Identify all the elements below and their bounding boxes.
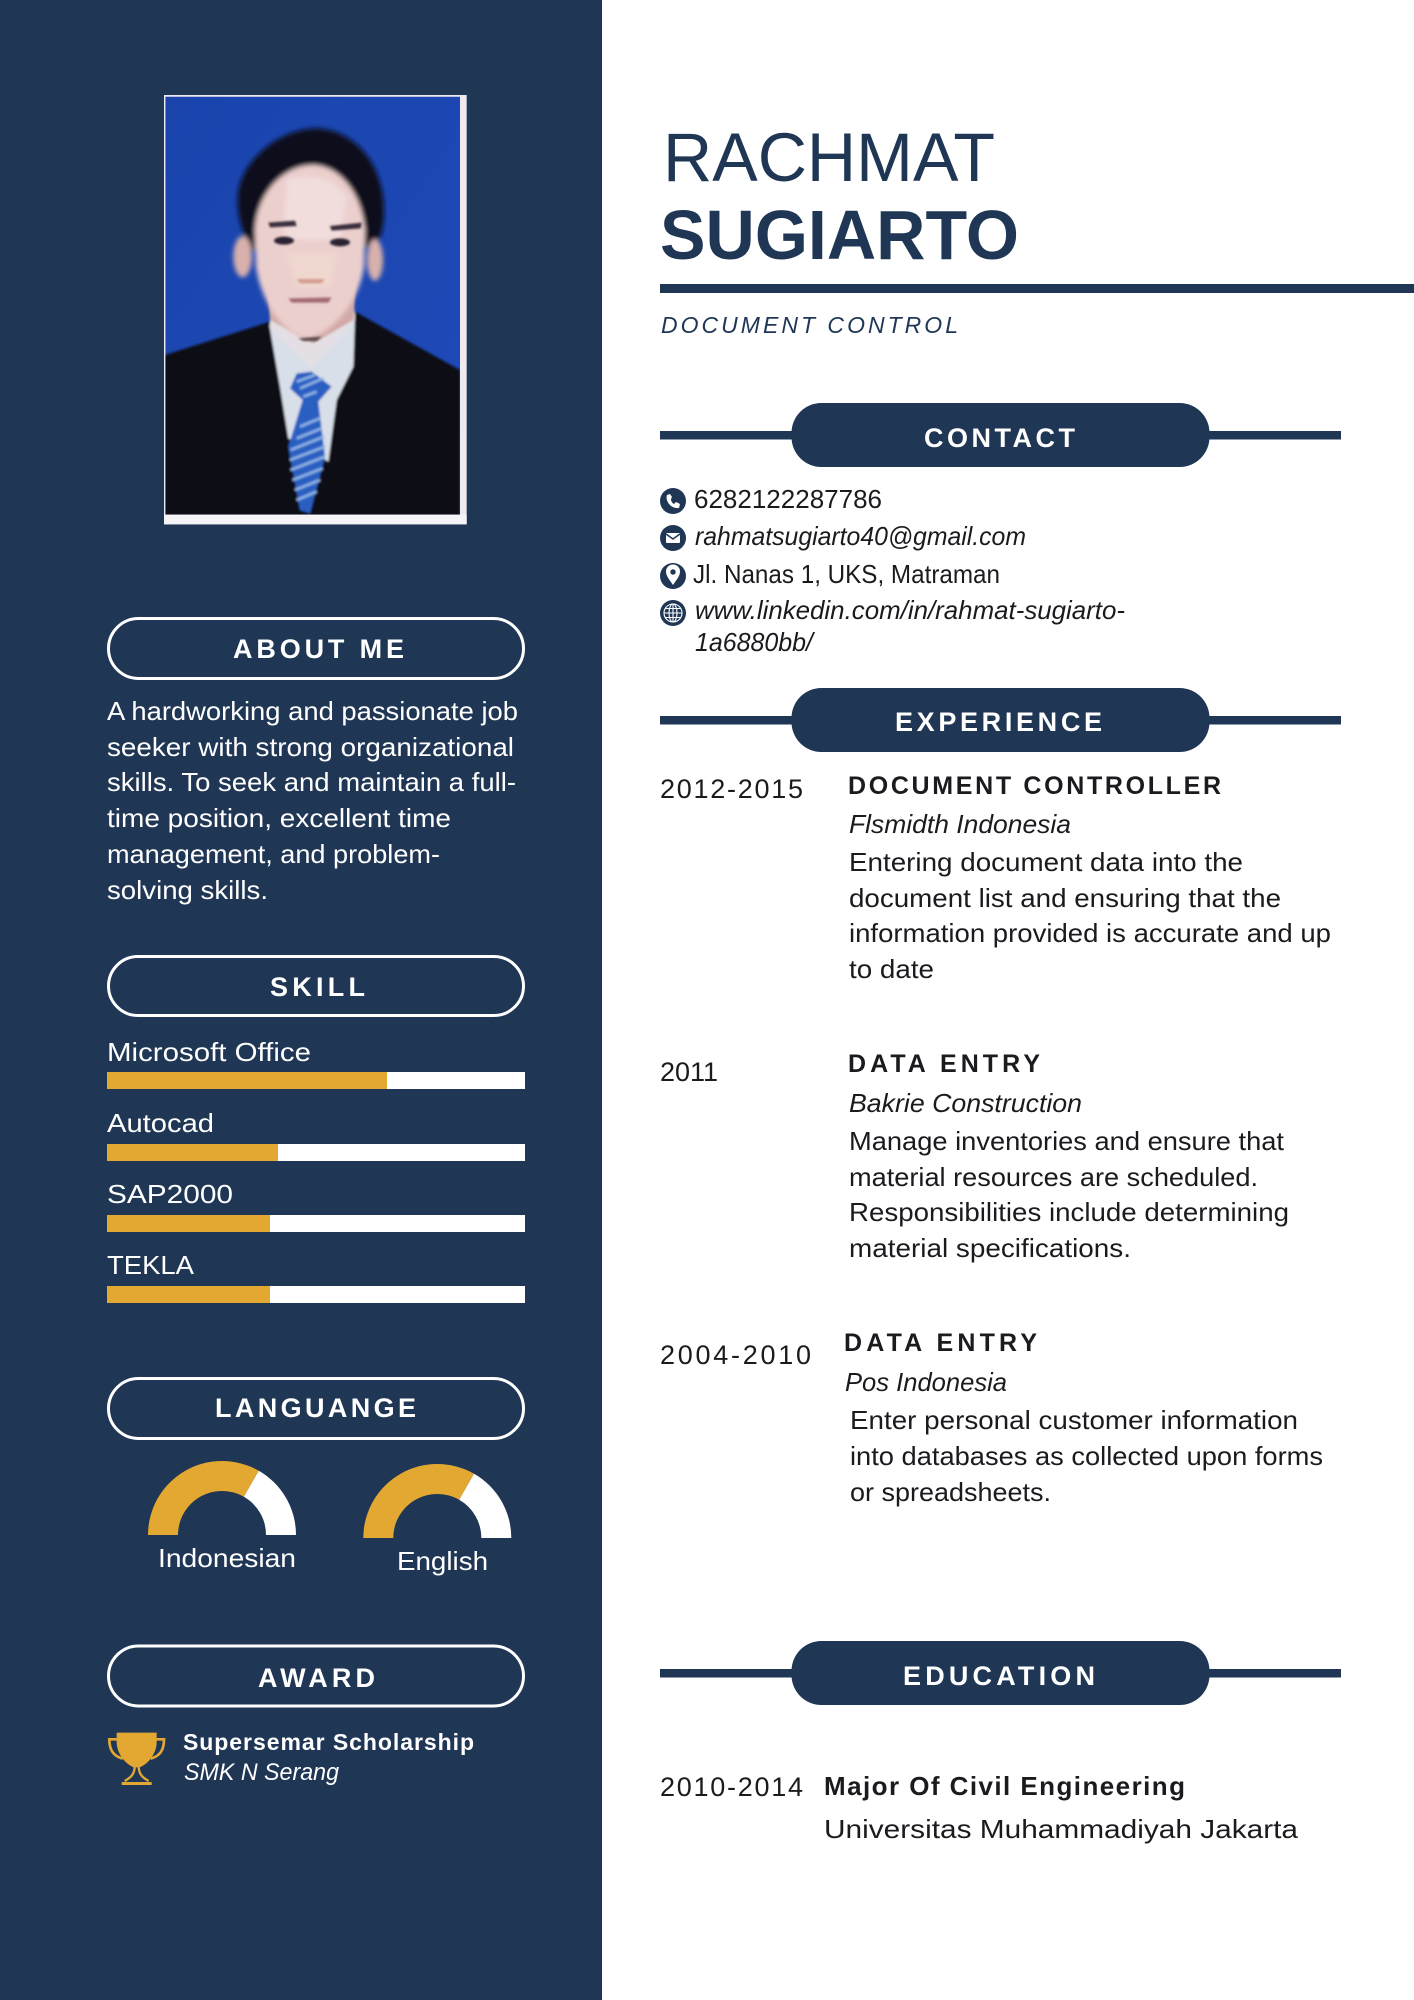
gauge: English: English xyxy=(397,1546,488,1576)
name: SUGIARTO xyxy=(660,196,1019,274)
experience entry 2011: Responsibilities include determining xyxy=(849,1197,1289,1227)
about me text: A hardworking and passionate job xyxy=(107,696,518,726)
award heading xyxy=(108,1646,524,1706)
contact: email: rahmatsugiarto40@gmail.com xyxy=(695,521,1026,551)
experience entry 2004-2010: Pos Indonesia xyxy=(845,1367,1007,1397)
experience heading xyxy=(660,688,1341,752)
education entry: Universitas Muhammadiyah Jakarta xyxy=(824,1814,1299,1844)
gauge: Indonesian xyxy=(148,1461,296,1573)
experience entry 2004-2010: Enter personal customer information xyxy=(850,1405,1298,1435)
skill: Microsoft Office xyxy=(107,1037,525,1089)
education entry: 2010-2014 xyxy=(660,1772,803,1802)
skill: SAP2000: SAP2000 xyxy=(107,1179,233,1209)
education entry: Major Of Civil Engineering xyxy=(824,1771,1185,1801)
education entry xyxy=(660,1771,1299,1844)
skill: TEKLA: TEKLA xyxy=(107,1250,195,1280)
award text xyxy=(183,1729,474,1786)
experience entry 2004-2010: 2004-2010 xyxy=(660,1340,811,1370)
contact: phone: 6282122287786 xyxy=(694,484,882,514)
name xyxy=(660,119,1019,274)
contact: website: 1a6880bb/ xyxy=(695,627,816,657)
experience entry 2012-2015: 2012-2015 xyxy=(660,774,803,804)
experience entry 2004-2010 xyxy=(660,1329,1323,1507)
experience entry 2011: DATA ENTRY xyxy=(848,1050,1040,1078)
about me heading xyxy=(108,618,524,678)
experience entry 2012-2015: information provided is accurate and up xyxy=(849,918,1331,948)
job title: DOCUMENT CONTROL xyxy=(661,312,958,338)
contact: website: www.linkedin.com/in/rahmat-sugiarto- xyxy=(695,595,1125,625)
experience entry 2004-2010: or spreadsheets. xyxy=(850,1477,1051,1507)
about me text xyxy=(107,696,518,905)
about me heading: ABOUT ME xyxy=(233,634,404,664)
experience heading: EXPERIENCE xyxy=(895,707,1102,737)
language heading: LANGUANGE xyxy=(215,1393,416,1423)
award heading: AWARD xyxy=(258,1663,375,1693)
experience entry 2012-2015: to date xyxy=(849,954,934,984)
title underline xyxy=(660,284,1414,293)
experience entry 2011: Bakrie Construction xyxy=(849,1088,1082,1118)
experience entry 2011: Manage inventories and ensure that xyxy=(849,1126,1285,1156)
experience entry 2011: material resources are scheduled. xyxy=(849,1162,1258,1192)
gauge: Indonesian: Indonesian xyxy=(158,1543,296,1573)
skill: Microsoft Office: Microsoft Office xyxy=(107,1037,311,1067)
about me text: management, and problem- xyxy=(107,839,440,869)
experience entry 2004-2010: DATA ENTRY xyxy=(844,1329,1037,1357)
skill: Autocad xyxy=(107,1108,525,1161)
experience entry 2012-2015: Flsmidth Indonesia xyxy=(849,809,1071,839)
name: RACHMAT xyxy=(663,119,995,196)
contact: website xyxy=(660,595,1125,657)
experience entry 2011: material specifications. xyxy=(849,1233,1131,1263)
award text: SMK N Serang xyxy=(184,1759,340,1786)
photo: portrait xyxy=(164,95,467,524)
about me text: time position, excellent time xyxy=(107,803,451,833)
about me text: seeker with strong organizational xyxy=(107,732,514,762)
experience entry 2011 xyxy=(660,1050,1289,1263)
skill heading xyxy=(108,956,524,1016)
skill heading: SKILL xyxy=(270,972,365,1002)
experience entry 2012-2015: Entering document data into the xyxy=(849,847,1243,877)
skill: Autocad: Autocad xyxy=(107,1108,214,1138)
language heading xyxy=(108,1378,524,1438)
skill: SAP2000 xyxy=(107,1179,525,1232)
about me text: solving skills. xyxy=(107,875,268,905)
about me text: skills. To seek and maintain a full- xyxy=(107,767,516,797)
contact: address: Jl. Nanas 1, UKS, Matraman xyxy=(693,559,1000,589)
education heading: EDUCATION xyxy=(903,1661,1095,1691)
experience entry 2012-2015: DOCUMENT CONTROLLER xyxy=(848,772,1221,800)
panel: left sidebar xyxy=(0,0,602,2000)
skill: TEKLA xyxy=(107,1250,525,1303)
experience entry 2004-2010: into databases as collected upon forms xyxy=(850,1441,1323,1471)
contact heading xyxy=(660,403,1341,467)
gauge: English xyxy=(363,1464,511,1576)
icon: trophy xyxy=(109,1733,164,1785)
experience entry 2012-2015 xyxy=(660,772,1331,984)
experience entry 2012-2015: document list and ensuring that the xyxy=(849,883,1281,913)
contact heading: CONTACT xyxy=(924,423,1076,453)
award text: Supersemar Scholarship xyxy=(183,1729,474,1755)
experience entry 2011: 2011 xyxy=(660,1057,718,1087)
education heading xyxy=(660,1641,1341,1705)
